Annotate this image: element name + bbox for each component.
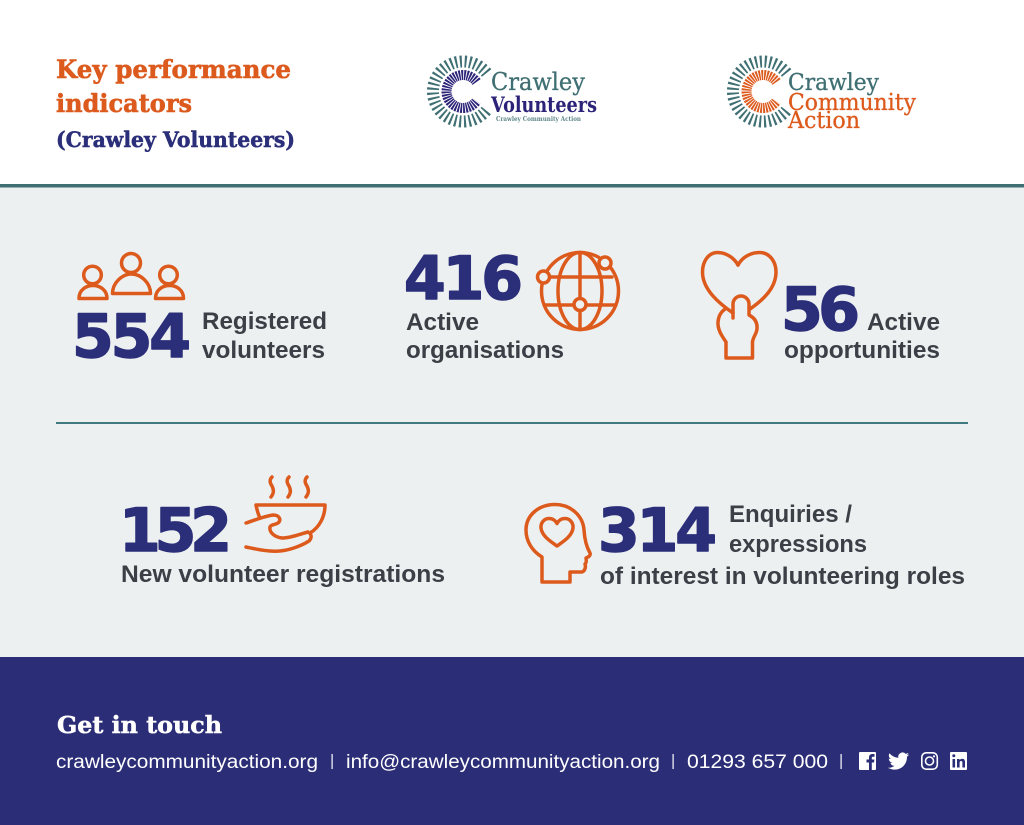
stat: 56 active opportunities: opportunities xyxy=(784,337,940,364)
title: indicators xyxy=(56,89,192,119)
title: Key performance xyxy=(56,55,291,85)
stat: 416 active organisations: 416 xyxy=(404,244,523,314)
icon: hand holding steaming cup xyxy=(246,477,325,551)
heading: get in touch: Get in touch xyxy=(57,711,222,739)
icon: globe with nodes xyxy=(538,252,618,330)
stat: 56 active opportunities: 56 xyxy=(781,275,860,345)
icon: twitter xyxy=(888,752,909,770)
logo: Crawley Community Action xyxy=(733,62,916,134)
panel: metrics background xyxy=(0,187,1024,657)
icon: hand holding heart xyxy=(702,252,776,358)
logo: Crawley Volunteers: Crawley xyxy=(491,68,585,96)
stat: 554 registered volunteers: Registered xyxy=(202,308,327,335)
logo: Crawley Volunteers: Crawley Community Action xyxy=(496,115,581,123)
logo: Crawley Community Action: Action xyxy=(787,108,860,134)
stat: 416 active organisations: Active xyxy=(406,309,479,336)
contact details: info@crawleycommunityaction.org xyxy=(346,752,660,773)
icon: instagram xyxy=(922,753,937,769)
stat: 416 active organisations xyxy=(404,244,564,364)
icon: linkedin xyxy=(950,752,967,770)
icon: facebook xyxy=(859,752,876,770)
stat: 314 enquiries / expressions of interest: of interest in volunteering roles xyxy=(600,563,965,590)
stat: 314 enquiries / expressions of interest xyxy=(598,496,965,590)
contact details xyxy=(56,752,842,773)
icon: three people xyxy=(79,254,184,298)
stat: 314 enquiries / expressions of interest: Enquiries / xyxy=(729,501,852,528)
contact details: 01293 657 000 xyxy=(687,752,828,773)
logo: Crawley Community Action: Community xyxy=(788,90,916,116)
stat: 56 active opportunities: Active xyxy=(867,309,940,336)
stat: 314 enquiries / expressions of interest: expressions xyxy=(729,531,867,558)
stat: 554 registered volunteers xyxy=(72,302,327,372)
stat: 152 new volunteer registrations xyxy=(119,496,445,588)
stat: 152 new volunteer registrations: 152 xyxy=(119,496,232,566)
title: (Crawley Volunteers) xyxy=(56,128,295,153)
panel: footer xyxy=(0,657,1024,825)
stat: 416 active organisations: organisations xyxy=(406,337,564,364)
icon: head with heart xyxy=(526,504,590,582)
stat: 554 registered volunteers: volunteers xyxy=(202,337,325,364)
title xyxy=(56,55,295,153)
stat: 152 new volunteer registrations: New volunteer registrations xyxy=(121,561,445,588)
stat: 56 active opportunities xyxy=(781,275,940,364)
logo: Crawley Community Action: Crawley xyxy=(788,70,879,96)
stat: 554 registered volunteers: 554 xyxy=(72,302,191,372)
logo: Crawley Volunteers: Volunteers xyxy=(490,92,597,117)
stat: 314 enquiries / expressions of interest: 314 xyxy=(598,496,717,566)
logo: Crawley Volunteers xyxy=(433,62,597,123)
contact details: crawleycommunityaction.org xyxy=(56,752,318,773)
